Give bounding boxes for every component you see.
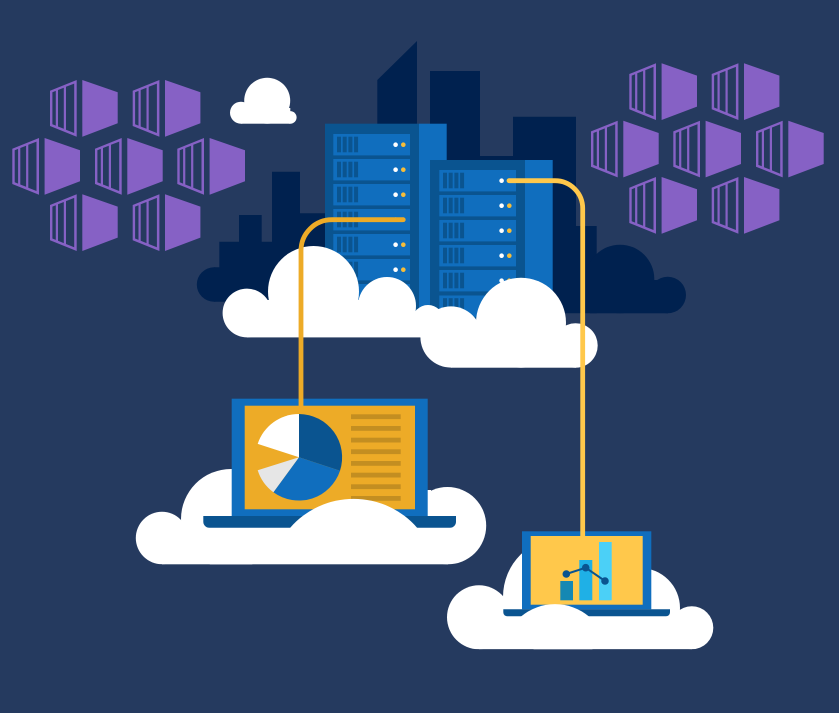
text lines <box>351 414 401 501</box>
containers: left cluster <box>12 80 245 251</box>
line chart <box>562 564 609 585</box>
arrow: connector from right server to small laptop <box>509 181 583 536</box>
large cloud behind laptop <box>136 469 486 569</box>
front cloud bump, large laptop <box>290 499 417 528</box>
small cloud <box>230 78 297 124</box>
server rack: right <box>430 160 553 335</box>
bar chart <box>560 542 612 600</box>
laptop: bar and line chart dashboard <box>503 531 670 616</box>
cloud under right server <box>420 278 598 368</box>
laptop: pie chart dashboard <box>203 399 456 528</box>
arrow: connector from left server to large laptop <box>301 220 403 406</box>
server rack: left <box>325 124 447 324</box>
city skyline silhouette <box>197 41 686 313</box>
front cloud bump, small laptop <box>521 604 589 616</box>
medium cloud behind small laptop <box>447 553 714 650</box>
cloud under left server <box>223 246 444 337</box>
containers: right cluster <box>591 63 824 234</box>
pie chart <box>258 414 342 501</box>
